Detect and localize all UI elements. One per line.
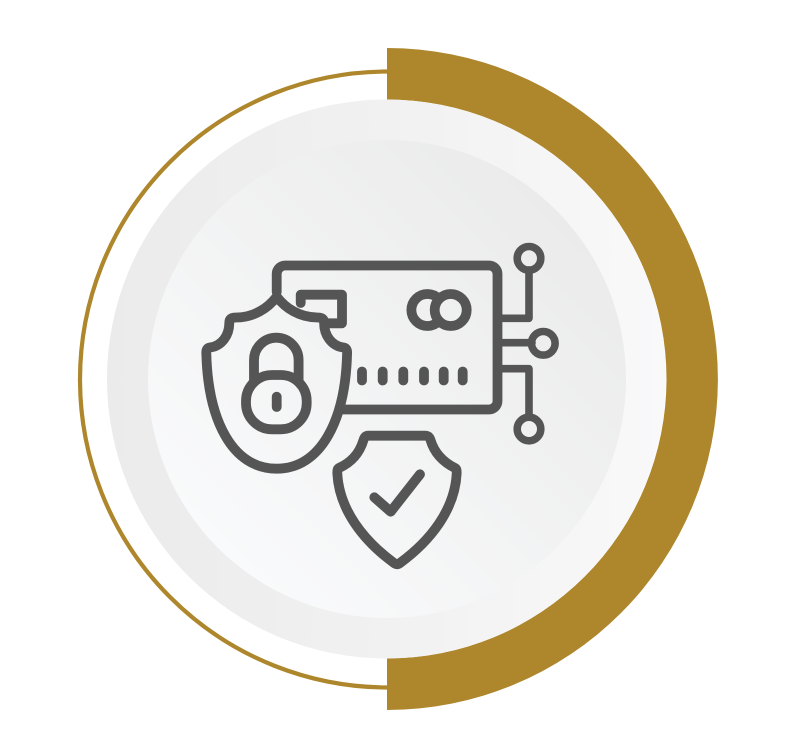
inner grey disc (148, 140, 626, 618)
outer grey disc (107, 100, 666, 658)
icon: secure credit card (206, 246, 555, 564)
icon: card outline (277, 266, 498, 410)
icon: lock shield (206, 297, 347, 469)
gold thick right arc (387, 48, 718, 710)
icon: card logo circles (411, 294, 467, 326)
icon: padlock (246, 338, 307, 429)
icon: check mark (374, 474, 420, 512)
icon: check shield (337, 436, 457, 564)
icon: card chip (301, 295, 342, 323)
gold thin left ring (80, 72, 388, 688)
icon: card number dots (362, 372, 463, 380)
icon: circuit connectors (502, 246, 555, 441)
